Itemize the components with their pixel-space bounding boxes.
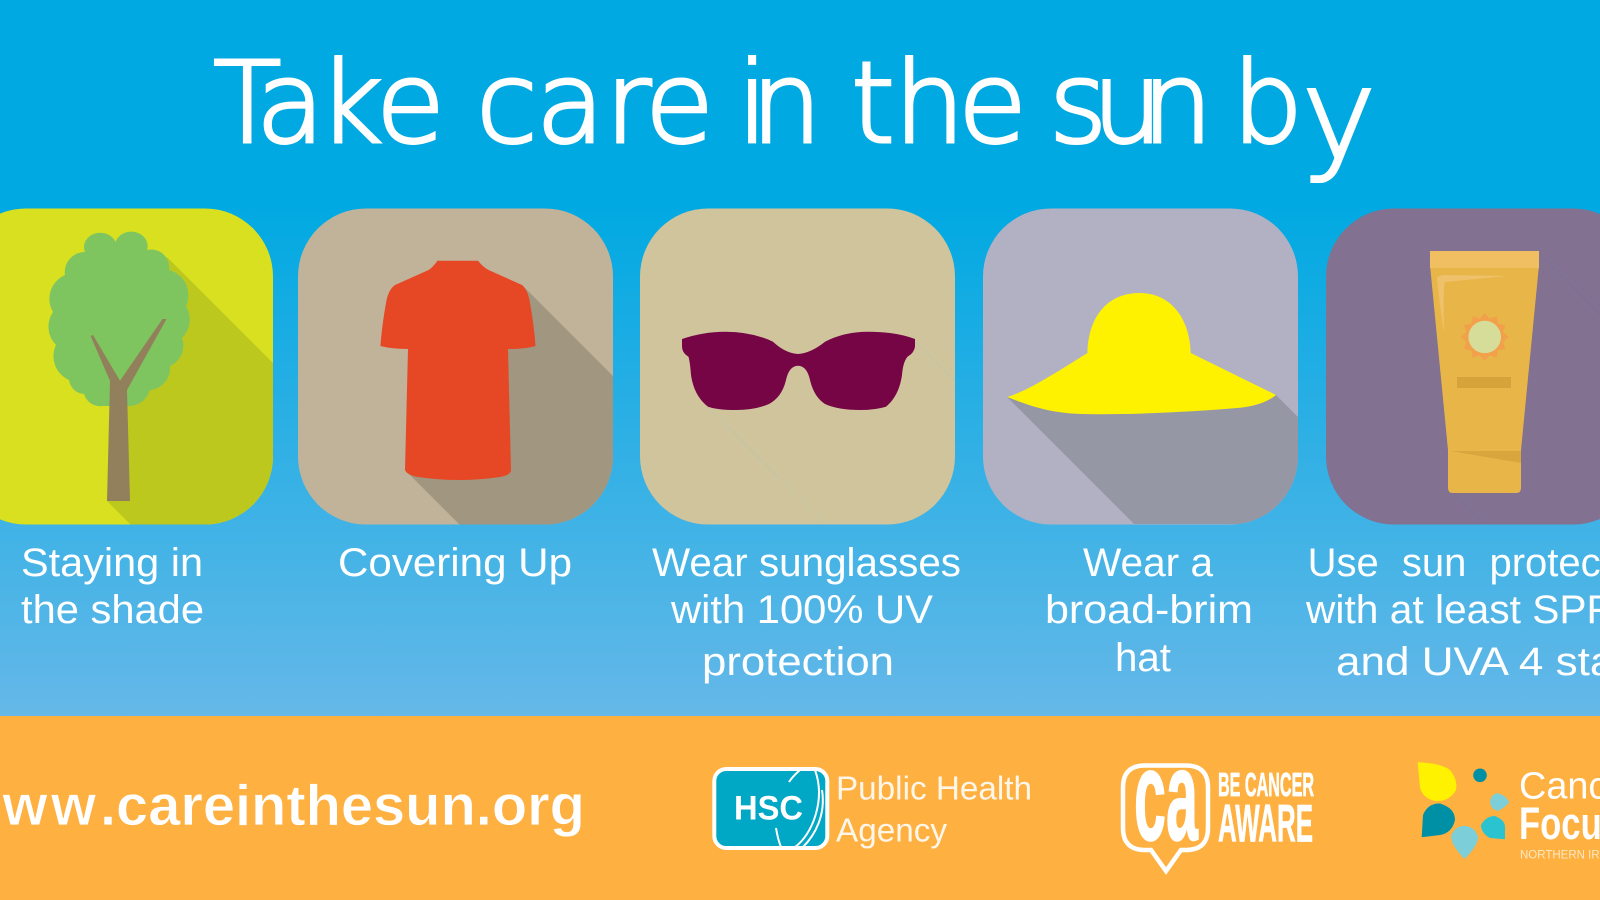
footer band: BE CANCER (1218, 767, 1314, 804)
icon: t-shirt (380, 261, 536, 480)
title: Take care in the sun b (213, 39, 1303, 169)
caption: staying in the shade: the shade (21, 588, 204, 632)
sky background (0, 0, 1600, 716)
caption: sun protection: and UVA 4 star (1336, 640, 1600, 684)
caption: covering up: Covering Up (338, 541, 572, 585)
tile shadow lines (708, 342, 960, 524)
icon: tree (48, 232, 190, 501)
card: lime tile (0, 208, 273, 524)
caption: broad-brim hat: Wear a (1083, 541, 1214, 585)
panel: sun protection (1305, 208, 1600, 684)
logo: HSC Public Health Agency (714, 769, 1032, 848)
card: sand tile (640, 208, 955, 524)
title: y (1302, 43, 1376, 188)
tile shadow (410, 287, 613, 524)
panel: staying in the shade (0, 208, 273, 624)
panel: broad-brim hat (983, 208, 1320, 680)
card: lilac tile (983, 208, 1298, 524)
logo: HSC Public Health Agency: HSC (734, 790, 803, 828)
card: purple tile (1326, 208, 1600, 524)
tile shadow lines (1455, 254, 1600, 524)
footer band: AWARE (1218, 794, 1313, 854)
caption: broad-brim hat (1045, 541, 1253, 680)
tile shadow (107, 257, 273, 524)
caption: sun protection (1305, 541, 1600, 684)
caption: broad-brim hat: hat (1115, 636, 1171, 680)
caption: sunglasses: Wear sunglasses (652, 541, 961, 585)
card: tan tile (298, 208, 613, 524)
tile shadow (1007, 395, 1320, 524)
logo: Cancer Focus Northern Ireland (1418, 762, 1600, 862)
logo: Be Cancer Aware: ca (1134, 725, 1198, 868)
caption: staying in the shade: Staying in (21, 541, 203, 585)
footer band (0, 716, 1600, 900)
caption: sunglasses: with 100% UV (670, 588, 933, 632)
caption: staying in the shade (21, 541, 204, 632)
caption: broad-brim hat: broad-brim (1045, 588, 1253, 632)
logo: HSC Public Health Agency: Public Health (836, 770, 1032, 806)
panel: sunglasses (640, 208, 961, 684)
icon: sun hat (1007, 293, 1276, 414)
caption: sunglasses: protection (702, 640, 894, 684)
logo: HSC Public Health Agency: Agency (836, 812, 947, 848)
panel: covering up (298, 208, 640, 585)
icon: sunglasses (682, 332, 915, 410)
caption: sunglasses (652, 541, 961, 684)
icon: sunscreen tube (1430, 251, 1539, 493)
